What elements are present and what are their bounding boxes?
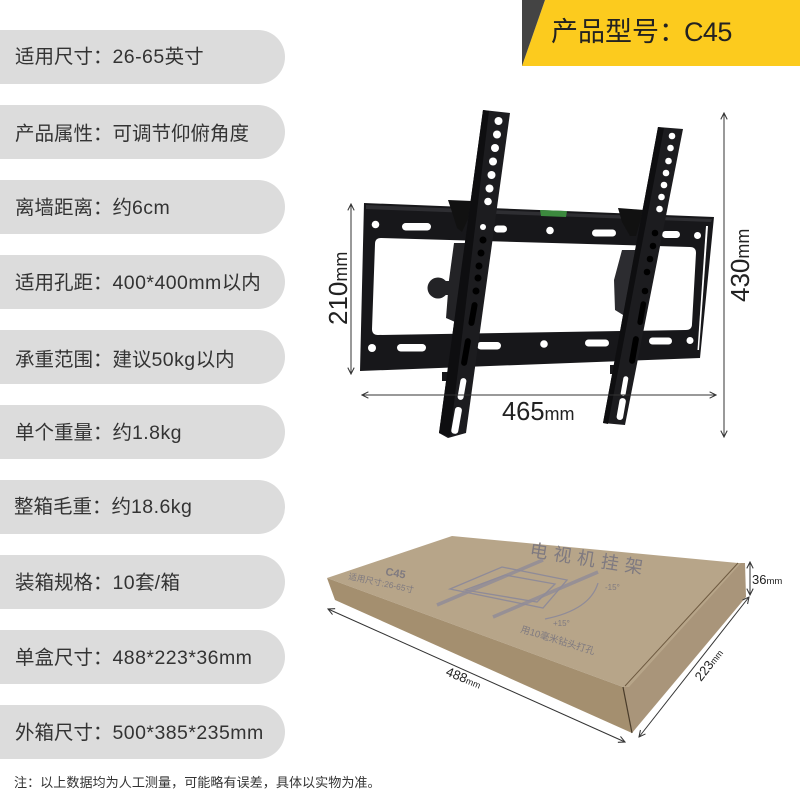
- right arm: [603, 127, 683, 425]
- dimension: 488mm: 488mm: [444, 664, 484, 692]
- left arm holes: [451, 117, 502, 434]
- box print: title: 电视机挂架: [528, 540, 650, 579]
- footnote: 注：以上数据均为人工测量，可能略有误差，具体以实物为准。: [14, 775, 381, 790]
- box print: bracket drawing: [437, 560, 598, 619]
- dimension: 430mm: 430mm: [725, 229, 755, 302]
- box side face: [623, 563, 746, 733]
- spec: single box size: 单盒尺寸：488*223*36mm: [15, 647, 252, 669]
- spec: outer carton size: [0, 705, 285, 759]
- dimension: 465mm: 465mm: [502, 398, 575, 426]
- box print: angles and note: +15°: [553, 619, 570, 628]
- spec: hole spacing: [0, 255, 285, 309]
- spec: outer carton size: 外箱尺寸：500*385*235mm: [15, 722, 264, 744]
- right arm dark holes: [629, 230, 658, 364]
- spec list: [0, 30, 285, 759]
- spec: unit weight: [0, 405, 285, 459]
- spec: product attribute: [0, 105, 285, 159]
- left arm: [439, 110, 510, 438]
- dimension: 223mm: [639, 597, 749, 737]
- tilt plates: [446, 243, 470, 325]
- spec: hole spacing: 适用孔距：400*400mm以内: [15, 272, 261, 294]
- dimension: 36mm: [750, 562, 782, 595]
- product image: packaging box: [327, 536, 746, 733]
- spec: wall distance: [0, 180, 285, 234]
- box print: angles and note: 用10毫米钻头打孔: [519, 623, 597, 658]
- frame lip shading: [366, 205, 712, 222]
- dimension: 223mm: 223mm: [692, 646, 726, 684]
- spec: screen size: [0, 30, 285, 84]
- spec: carton packing: [0, 555, 285, 609]
- spec: load range: 承重范围：建议50kg以内: [15, 349, 235, 371]
- dimension: 488mm: [328, 609, 625, 742]
- frame holes: [368, 221, 708, 352]
- spec: carton gross weight: 整箱毛重：约18.6kg: [14, 496, 192, 518]
- box print: model: 适用尺寸:26-65寸: [348, 571, 415, 595]
- box print: angles and note: -15°: [605, 583, 620, 592]
- dimension: 36mm: 36mm: [752, 572, 782, 587]
- spec: product attribute: 产品属性：可调节仰俯角度: [15, 123, 249, 145]
- right arm holes: [616, 133, 675, 420]
- mounting feet: [442, 372, 448, 381]
- model number banner: [522, 0, 800, 66]
- bracket frame: [360, 203, 714, 371]
- dimension: 210mm: 210mm: [323, 252, 353, 325]
- spec: screen size: 适用尺寸：26-65英寸: [15, 46, 204, 68]
- spec: carton gross weight: [0, 480, 285, 534]
- spirit level: [540, 210, 567, 217]
- box print: model: C45: [384, 566, 406, 581]
- spec: wall distance: 离墙距离：约6cm: [15, 197, 170, 219]
- spec: unit weight: 单个重量：约1.8kg: [15, 422, 182, 444]
- product image: wall mount bracket: [360, 110, 714, 438]
- box front face: [327, 578, 632, 733]
- spec: carton packing: 装箱规格：10套/箱: [15, 572, 180, 594]
- box print: angles and note: [519, 583, 620, 658]
- model number banner: 产品型号：C45: [551, 17, 732, 47]
- spec: load range: [0, 330, 285, 384]
- box top face: [327, 536, 738, 687]
- knob: [428, 278, 454, 298]
- left arm dark holes: [461, 236, 486, 366]
- spec: single box size: [0, 630, 285, 684]
